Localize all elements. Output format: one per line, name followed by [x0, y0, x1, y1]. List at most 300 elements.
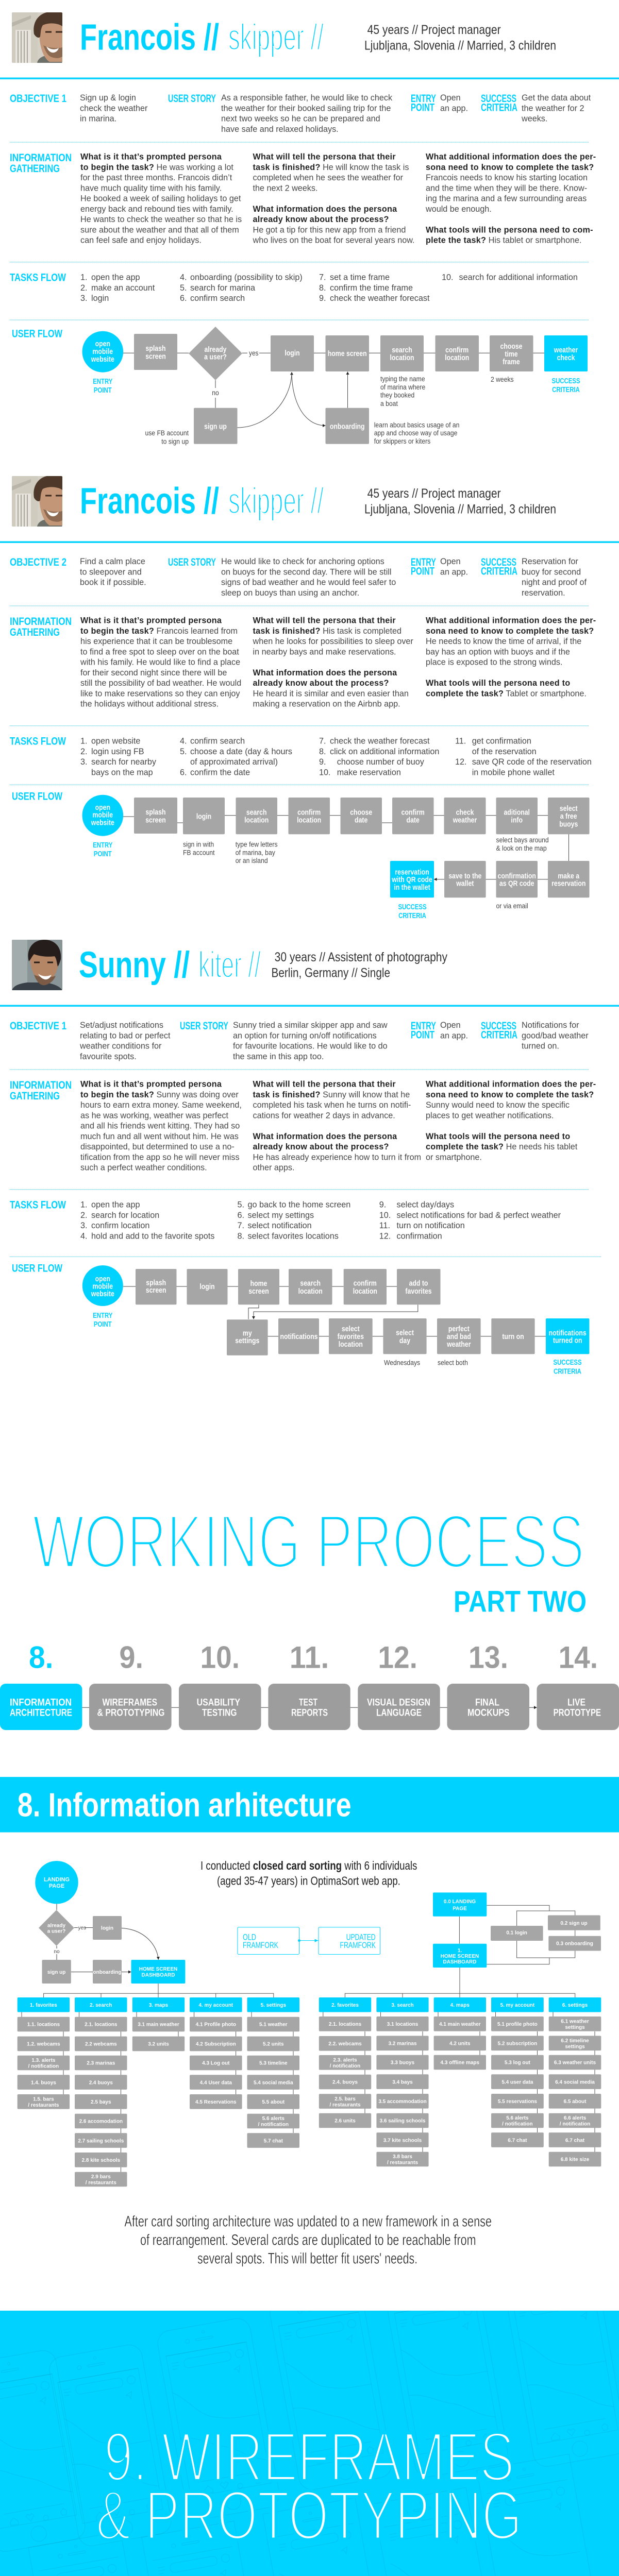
column: settings: 5.1 weather [259, 2022, 288, 2028]
connector lines [345, 1905, 575, 1997]
box: notifications turned on (success): turned on [553, 1336, 582, 1345]
information gathering: What information does the persona [253, 205, 397, 214]
tasks flow [10, 1199, 561, 1241]
success criteria [481, 93, 591, 124]
column: search: 3.7 kite schools [383, 2138, 422, 2143]
information gathering: sona need to know to complete the task? [426, 626, 594, 636]
information gathering: What is it that’s prompted persona [80, 616, 222, 625]
section: wireframes and prototyping [0, 2311, 619, 2576]
column: search: 2.8 kite schools [82, 2158, 120, 2163]
box: onboarding [93, 1960, 122, 1984]
column: search: 3.2 marinas [388, 2041, 417, 2046]
box: select day: day [399, 1336, 410, 1345]
box: check weather: weather [453, 816, 477, 824]
column: maps: 4.3 offline maps [441, 2060, 480, 2066]
box: search location: search [300, 1279, 321, 1287]
note: learn about basics: for skippers or kiters [374, 437, 431, 445]
user story: on buoys for the second day. There will be still [221, 567, 392, 577]
tasks flow: confirm the date [190, 768, 250, 777]
box: splash screen [134, 334, 177, 370]
information gathering: can feel safe and enjoy holidays. [80, 236, 202, 245]
user story: USER STORY [168, 556, 216, 568]
note: select bays [496, 836, 549, 852]
column: maps: 3.1 main weather [138, 2022, 179, 2028]
information gathering: energy back and rebound ties with family. [80, 205, 233, 214]
box: choose time frame: choose [500, 342, 523, 350]
persona details: Ljubljana, Slovenia // Married, 3 children [364, 39, 556, 53]
box: select favorites location [329, 1318, 373, 1354]
success criteria: CRITERIA [481, 1029, 517, 1041]
step 14: live prototype: 14. [559, 1640, 598, 1674]
information gathering: like to make reservations so they can enjoy [80, 689, 240, 698]
column: settings: / notification [258, 2122, 289, 2128]
information gathering: for their second night since there will be [80, 668, 227, 677]
box: 1 home screen dashboard [433, 1944, 487, 1968]
column: settings [549, 1997, 601, 2166]
tasks flow: turn on notification [397, 1221, 465, 1230]
success criteria: SUCCESS [481, 93, 516, 105]
column: search: 3.5 accommodation [378, 2099, 427, 2105]
box: onboarding: onboarding [93, 1970, 122, 1975]
box: splash screen: screen [145, 816, 166, 824]
success criteria: CRITERIA [481, 566, 517, 578]
objective: OBJECTIVE 1 [10, 1020, 66, 1032]
column: search [75, 1997, 127, 2187]
information gathering: task is finished? He will know the task is [253, 163, 409, 172]
arrow: old to updated framework [298, 1939, 319, 1942]
box: confirm location [435, 335, 479, 371]
entry circle: website [91, 1290, 114, 1298]
entry circle [82, 1265, 123, 1306]
box: search location [289, 1269, 332, 1304]
tasks flow: search for additional information [459, 273, 578, 282]
box: 1 home screen dashboard: DASHBOARD [443, 1959, 476, 1965]
tasks flow: of approximated arrival) [190, 757, 278, 767]
objective: to sleepover and [80, 567, 142, 577]
column: settings: 6.3 weather units [554, 2060, 596, 2066]
label: entry point [93, 1311, 112, 1328]
column: settings: 6.8 kite size [561, 2157, 590, 2163]
information gathering: task is finished? Sunny will know that he [253, 1090, 410, 1099]
persona section: Francois objective 1 [0, 12, 619, 446]
box: confirm date: date [407, 816, 420, 824]
information gathering: He got a tip for this new app from a friend [253, 225, 406, 234]
column: my account: 4.4 User data [200, 2080, 232, 2086]
label: success criteria [553, 1358, 582, 1376]
column: favorites [18, 1997, 70, 2109]
text: after card sorting: After card sorting architecture was updated to a new framework in a sense [124, 2213, 492, 2230]
box: confirm location [289, 798, 330, 834]
box: select favorites location: select [342, 1325, 360, 1333]
card: old framework: FRAMFORK [243, 1940, 278, 1950]
tasks flow: TASKS FLOW [10, 736, 66, 748]
decision: already a user: already [47, 1923, 65, 1929]
box: choose date [340, 798, 382, 834]
column: search: 2.7 sailing schools [78, 2138, 124, 2144]
persona details [364, 23, 556, 53]
column: my account: 5.2 subscription [498, 2041, 537, 2046]
note: typing the name: typing the name [380, 375, 425, 383]
box: login: login [199, 1282, 215, 1291]
persona section: Sunny [0, 940, 619, 1376]
box: 1 home screen dashboard: HOME SCREEN [441, 1954, 479, 1959]
tasks flow: TASKS FLOW [10, 1199, 66, 1211]
column: favorites: 2.6 units [334, 2119, 356, 2124]
persona photo: Sunny [12, 940, 62, 990]
entry circle: open [95, 803, 110, 811]
entry point: ENTRY [411, 93, 436, 105]
user story: USER STORY [180, 1020, 228, 1032]
tasks flow: bays on the map [91, 768, 153, 777]
step 12: visual design language [358, 1640, 440, 1730]
column: settings: 5.6 alerts [262, 2116, 285, 2122]
heading: working process part two: PART TWO [454, 1585, 587, 1619]
objective: Sign up & login [80, 93, 136, 103]
box: confirm location: confirm [354, 1279, 377, 1287]
tasks flow: 8. [319, 283, 326, 293]
box: weather check (success) [544, 335, 588, 371]
tasks flow [10, 272, 578, 303]
note: 2 weeks: 2 weeks [491, 375, 514, 383]
success criteria: CRITERIA [481, 102, 517, 114]
objective: OBJECTIVE 2 [10, 556, 66, 568]
box: save to the wallet: wallet [456, 879, 474, 888]
information gathering: completed his task when he turns on notifi- [253, 1100, 411, 1110]
box: aditional info: aditional [504, 808, 530, 817]
label: entry point: ENTRY [93, 377, 112, 385]
entry circle [82, 331, 123, 372]
note: learn about basics [374, 421, 459, 445]
tasks flow: 1. [80, 1200, 88, 1210]
label: entry point [93, 840, 112, 858]
column: my account [491, 1997, 544, 2147]
user flow diagram: objective 1 [82, 327, 588, 446]
background: sketched phone screens [0, 2311, 619, 2576]
objective: Set/adjust notifications [80, 1021, 163, 1030]
step 9: wireframes and prototyping: & PROTOTYPING [97, 1707, 165, 1718]
connector lines and arrows [57, 1904, 131, 1972]
entry circle: website [91, 818, 114, 827]
information gathering: He booked a week of sailing holidays to get [80, 194, 241, 203]
column: favorites: 2.3. alerts [333, 2058, 357, 2063]
card: updated framework: FRAMFORK [340, 1940, 376, 1950]
box: notifications turned on (success): notifications [549, 1329, 587, 1337]
information gathering: disappointed, but determined to use a no- [80, 1142, 235, 1151]
information gathering: Francois needs to know his starting location [426, 173, 588, 182]
step 14: live prototype: LIVE [567, 1697, 585, 1708]
box: confirm location: location [353, 1287, 377, 1295]
column: search [376, 1997, 429, 2166]
tasks flow: 3. [80, 1221, 88, 1230]
success criteria: Notifications for [522, 1021, 579, 1030]
entry point: POINT [411, 566, 434, 578]
title: skipper role: skipper // [228, 18, 324, 58]
box: search location: search [392, 346, 412, 354]
tasks flow: select day/days [397, 1200, 454, 1210]
entry point: an app. [440, 567, 468, 577]
entry circle: mobile [92, 347, 113, 355]
box: weather check (success): weather [554, 346, 578, 354]
information gathering: What tools will the persona need to [426, 1132, 570, 1141]
box: home screen: home [250, 1279, 267, 1287]
column: search: 2.6 accomodation [79, 2119, 123, 2125]
success criteria: night and proof of [522, 578, 587, 587]
box: add to favorites: add to [409, 1279, 428, 1287]
step 13: final mockups: MOCKUPS [467, 1707, 509, 1718]
tasks flow: confirm location [91, 1221, 149, 1230]
column: settings: 6.1 weather [561, 2019, 589, 2025]
column: settings: 6.2 timeline [561, 2038, 589, 2044]
box: login [271, 335, 314, 371]
tasks flow: 12. [455, 757, 467, 767]
column: my account [190, 1997, 242, 2109]
header rule [0, 541, 619, 543]
box: 0.1 login [491, 1926, 543, 1941]
information gathering: still the possibility of bad weather. He would [80, 679, 241, 688]
box: 0.3 onboarding [548, 1936, 601, 1951]
tasks flow: 12. [379, 1231, 391, 1241]
user story [168, 93, 393, 134]
tasks flow: select notification [247, 1221, 312, 1230]
note: use FB account: to sign up [161, 437, 189, 446]
tasks flow: 9. [319, 294, 326, 303]
step 10: usability testing: 10. [200, 1640, 240, 1674]
information gathering: He has already experience how to turn it from [253, 1153, 421, 1162]
tasks flow: open the app [91, 1200, 140, 1210]
information gathering: INFORMATION [10, 1079, 72, 1091]
information gathering: task is finished? His task is completed [253, 626, 401, 636]
information gathering: What additional information does the per- [426, 616, 596, 625]
objective: relating to bad or perfect [80, 1031, 171, 1040]
note: typing the name: of marina where [380, 383, 425, 391]
information gathering: What tools will the persona need to [426, 679, 570, 688]
tasks flow: open website [91, 737, 140, 746]
decision: already a user [39, 1910, 74, 1946]
information gathering: to begin the task? He was working a lot [80, 163, 233, 172]
box: search location: search [246, 808, 267, 817]
box: select a free buoys: a free [560, 812, 577, 820]
tasks flow: in mobile phone wallet [472, 768, 555, 777]
step 8: information architecture: 8. [29, 1640, 54, 1674]
success criteria: turned on. [522, 1042, 559, 1051]
information gathering: What additional information does the per- [426, 1080, 596, 1089]
user story: next two weeks so he can be prepared and [221, 114, 380, 124]
success criteria: weeks. [521, 114, 547, 124]
label: success criteria [398, 902, 427, 920]
column: search: 2.1. locations [85, 2022, 118, 2028]
note: select bays: & look on the map [496, 844, 547, 852]
column: settings: 5.3 timeline [259, 2061, 288, 2066]
tasks flow: make reservation [337, 768, 401, 777]
title: skipper role: skipper // [228, 481, 324, 522]
box: my settings: my [243, 1329, 252, 1337]
box: sign up: sign up [204, 422, 227, 431]
label: yes: yes [78, 1925, 86, 1931]
entry point [411, 1020, 468, 1041]
box: sign up [194, 408, 237, 444]
objective: check the weather [80, 104, 148, 113]
tasks flow: save QR code of the reservation [472, 757, 592, 767]
tasks flow: 1. [80, 273, 88, 282]
box: 0.1 login: 0.1 login [506, 1930, 527, 1936]
tasks flow [10, 736, 592, 777]
information gathering: bay has an option with buoys and if the [426, 647, 570, 656]
tasks flow: 2. [80, 283, 88, 293]
old architecture diagram [18, 1861, 299, 2187]
information gathering: complete the task? He needs his tablet [426, 1142, 578, 1151]
step 8: information architecture: ARCHITECTURE [10, 1707, 72, 1718]
column: search: 2. search [90, 2003, 112, 2008]
title: 9. wireframes and prototyping [96, 2418, 522, 2554]
note: learn about basics: learn about basics usage of an [374, 421, 459, 429]
column: my account: 4.3 Log out [202, 2061, 230, 2066]
column: favorites: 2.5. bars [334, 2096, 356, 2102]
tasks flow: 10. [442, 273, 454, 282]
tasks flow: check the weather forecast [330, 294, 430, 303]
card: old framework [238, 1927, 299, 1954]
tasks flow: choose number of buoy [337, 757, 425, 767]
box: search location: location [298, 1287, 323, 1295]
tasks flow: 8. [319, 747, 326, 756]
box: confirm location: location [445, 353, 469, 362]
information gathering: cations for weather 2 days in advance. [253, 1111, 395, 1120]
step 11: test reports [268, 1640, 350, 1730]
information gathering: He heard it is similar and even easier than [253, 689, 409, 698]
column: settings: 6.4 social media [555, 2079, 595, 2085]
step 13: final mockups [447, 1640, 529, 1730]
tasks flow: make an account [91, 283, 155, 293]
information gathering: plete the task? His tablet or smartphone. [426, 236, 581, 245]
box: home screen: home screen [328, 349, 367, 358]
tasks flow: 8. [237, 1231, 244, 1241]
column: maps: 4. maps [450, 2003, 470, 2008]
column: settings: / notification [560, 2122, 590, 2127]
column: search: 3.6 sailing schools [380, 2119, 426, 2124]
user story: sleep on buoys than using an anchor. [221, 588, 359, 598]
information gathering: GATHERING [10, 163, 60, 175]
column: maps: 4.1 main weather [439, 2022, 481, 2027]
information gathering: What will tell the persona that their [253, 1080, 396, 1089]
user flow diagram: objective 2 [82, 795, 590, 920]
label: success criteria: SUCCESS [398, 902, 427, 911]
landing page circle: LANDING [44, 1876, 70, 1883]
note: type few letters: of marina, bay [236, 849, 275, 857]
information gathering: He wants to check the weather so that he is [80, 215, 242, 224]
box: confirmation as QR code: confirmation [497, 872, 536, 880]
column: my account: 5.4 user data [501, 2079, 533, 2085]
information gathering: making a reservation on the Airbnb app. [253, 700, 400, 709]
information gathering: What is it that’s prompted persona [80, 152, 222, 162]
intro text: closed card sorting: I conducted closed card sorting with 6 individuals [200, 1859, 417, 1872]
success criteria: SUCCESS [481, 1020, 516, 1032]
box: notifications: notifications [280, 1332, 318, 1341]
box: perfect and bad weather: perfect [448, 1325, 470, 1333]
user story: have safe and relaxed holidays. [221, 125, 339, 134]
column: favorites: 1.2. webcams [27, 2042, 60, 2047]
information gathering: his experience that it can be troublesome [80, 637, 232, 646]
column: favorites: 1. favorites [30, 2003, 57, 2008]
box: splash screen: splash [146, 1278, 166, 1287]
information gathering: in nearby bays and make reservations. [253, 647, 396, 656]
box: sign up [42, 1960, 71, 1984]
information gathering: What will tell the persona that their [253, 616, 396, 625]
header rule [0, 77, 619, 79]
box: login: login [196, 812, 211, 821]
label: entry point: POINT [94, 1319, 112, 1328]
box: my settings [227, 1319, 268, 1355]
title: Francois name: Francois // [80, 18, 219, 58]
step 8: information architecture [0, 1640, 82, 1730]
box: check weather: check [456, 808, 474, 817]
label: success criteria: CRITERIA [398, 911, 426, 920]
column: settings: 6.6 alerts [564, 2115, 587, 2121]
column: settings [247, 1997, 299, 2148]
success criteria: SUCCESS [481, 556, 516, 568]
column: my account: 6.7 chat [508, 2138, 527, 2143]
column: maps [434, 1997, 486, 2070]
box: 1 home screen dashboard: 1. [458, 1948, 462, 1954]
box: choose date: choose [350, 808, 373, 817]
note: select both: select both [438, 1359, 468, 1367]
success criteria: good/bad weather [522, 1031, 589, 1040]
box: save to the wallet: save to the [448, 872, 482, 880]
column: my account: 5.6 alerts [506, 2115, 529, 2121]
box: search location [380, 335, 424, 371]
persona details: Ljubljana, Slovenia // Married, 3 children [364, 502, 556, 517]
entry point: an app. [440, 1031, 468, 1040]
tasks flow: confirm search [190, 737, 245, 746]
column: search: 2.3 marinas [87, 2061, 115, 2066]
information gathering: GATHERING [10, 626, 60, 638]
box: 0.2 sign up [548, 1916, 600, 1930]
box: confirm date: confirm [401, 808, 425, 817]
column: my account: 4.2 Subscription [196, 2042, 236, 2047]
box: onboarding: onboarding [330, 422, 364, 431]
user story: for favourite locations. He would like to do [233, 1042, 388, 1051]
objective [10, 556, 146, 587]
objective: in marina. [80, 114, 116, 124]
box: login [93, 1916, 122, 1940]
card: updated framework [319, 1927, 380, 1954]
box: notifications [278, 1318, 319, 1354]
box: reservation in wallet (success): with QR code [391, 875, 432, 884]
box: login [187, 1269, 228, 1304]
box: select a free buoys: select [560, 804, 578, 812]
box: choose time frame [490, 335, 533, 371]
box: 0.0 landing page [433, 1892, 487, 1917]
entry circle: mobile [92, 1282, 113, 1291]
user story: Sunny tried a similar skipper app and saw [233, 1021, 388, 1030]
box: home screen dashboard [131, 1960, 185, 1984]
column: favorites [319, 1997, 371, 2128]
box: home screen [238, 1269, 279, 1304]
tasks flow: login [91, 294, 109, 303]
box: make a reservation [548, 861, 590, 897]
information gathering: much fun and all went without him. He was [80, 1132, 239, 1141]
label: entry point [93, 377, 112, 394]
entry point: Open [440, 93, 461, 103]
user story [180, 1020, 388, 1061]
information gathering: have much quality time with his family. [80, 183, 222, 193]
tasks flow: select favorites locations [247, 1231, 339, 1241]
box: splash screen: splash [146, 808, 165, 816]
success criteria [481, 1020, 589, 1051]
box: perfect and bad weather [437, 1318, 481, 1354]
column: maps: 3.2 units [148, 2042, 169, 2047]
title: Francois name: Francois // [80, 481, 219, 522]
box: home screen dashboard: DASHBOARD [141, 1972, 175, 1978]
tasks flow: TASKS FLOW [10, 272, 66, 284]
